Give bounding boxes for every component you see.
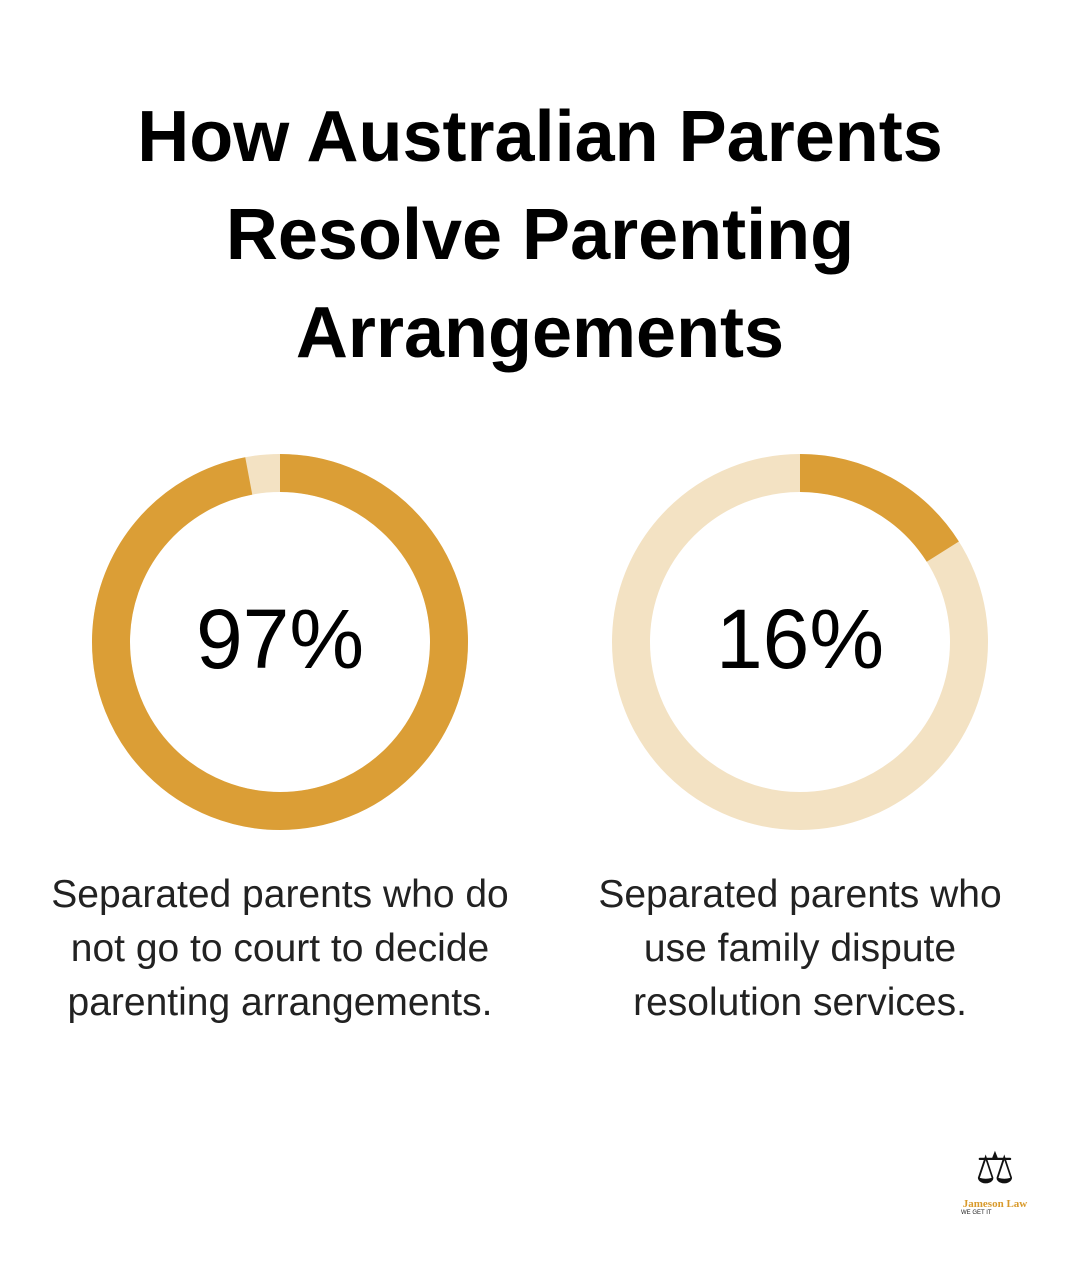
donut: 16% — [631, 473, 969, 811]
title: Arrangements — [296, 293, 784, 373]
title: How Australian Parents — [137, 97, 943, 177]
donut: 97% — [111, 473, 449, 811]
title — [137, 97, 943, 373]
logo: ⚖ — [975, 1144, 1015, 1193]
title: Resolve Parenting — [226, 195, 854, 275]
logo — [961, 1144, 1028, 1216]
logo: Jameson Law — [963, 1198, 1027, 1210]
donut: 97%: 97% — [196, 592, 364, 686]
donut: 16%: 16% — [716, 592, 884, 686]
text: right description: Separated parents who use family dispute resolution services. — [598, 873, 1002, 1024]
logo: WE GET IT — [961, 1210, 992, 1216]
text: left description: Separated parents who do not go to court to decide parenting arrangements. — [51, 873, 509, 1024]
